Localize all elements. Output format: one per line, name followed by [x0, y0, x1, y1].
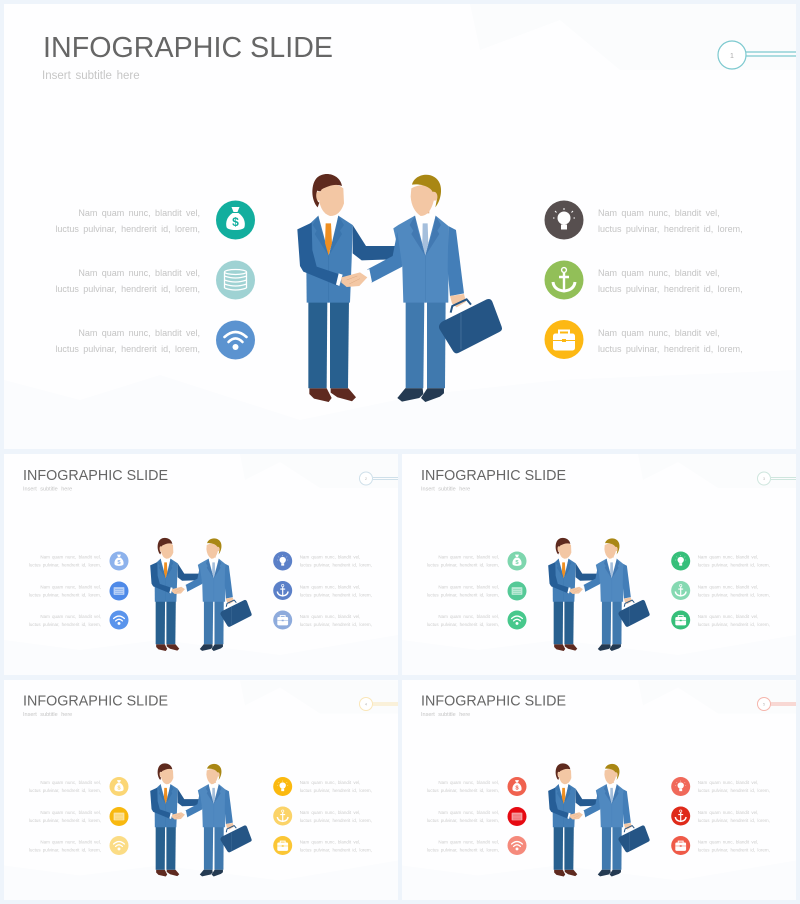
subtitle: Insert subtitle here [421, 486, 470, 492]
text block: left row 3: Nam quam nunc, blandit vel, [78, 328, 200, 338]
text blocks: right: Nam quam nunc, blandit vel, [300, 780, 360, 785]
icons: right [273, 552, 292, 630]
illustration: two businessmen shaking hands [297, 174, 502, 402]
page number badge [360, 472, 398, 485]
icons: left [508, 552, 526, 630]
text blocks: left: luctus pulvinar, hendrerit id, lorem, [29, 622, 101, 627]
text blocks: left: Nam quam nunc, blandit vel, [438, 780, 499, 785]
text block: right row 2 [598, 268, 743, 294]
text blocks: left: Nam quam nunc, blandit vel, [40, 554, 101, 560]
panel: red variant [402, 680, 796, 900]
text blocks: left: Nam quam nunc, blandit vel, [438, 584, 499, 590]
title: INFOGRAPHIC SLIDE [421, 468, 566, 484]
text blocks: right: luctus pulvinar, hendrerit id, lorem, [698, 818, 770, 823]
text block: left row 1 [55, 208, 200, 234]
text blocks: left: luctus pulvinar, hendrerit id, lorem, [427, 562, 499, 568]
text blocks: right: luctus pulvinar, hendrerit id, lorem, [698, 788, 770, 793]
title: INFOGRAPHIC SLIDE [43, 32, 333, 64]
text blocks: left [427, 780, 499, 852]
icon: light bulb [544, 200, 584, 240]
text blocks: right [698, 554, 770, 627]
text blocks: left: luctus pulvinar, hendrerit id, lorem, [427, 592, 499, 598]
text blocks: left: Nam quam nunc, blandit vel, [438, 614, 499, 619]
text blocks: left: luctus pulvinar, hendrerit id, lorem, [29, 848, 101, 852]
text block: right row 1: luctus pulvinar, hendrerit id, lorem, [598, 224, 743, 234]
page number badge [718, 41, 796, 69]
text blocks: left: Nam quam nunc, blandit vel, [40, 584, 101, 590]
text blocks: right [698, 780, 770, 852]
text block: right row 1 [598, 208, 743, 234]
text blocks: right: Nam quam nunc, blandit vel, [300, 840, 360, 844]
icon: money bag [216, 200, 255, 240]
title: INFOGRAPHIC SLIDE [23, 694, 168, 710]
text block: left row 3: luctus pulvinar, hendrerit id, lorem, [55, 344, 200, 354]
page number badge: 5 [763, 702, 766, 706]
text blocks: left: Nam quam nunc, blandit vel, [40, 780, 101, 785]
icons: left [110, 777, 128, 855]
text blocks: right: luctus pulvinar, hendrerit id, lorem, [300, 818, 372, 823]
text blocks: left: luctus pulvinar, hendrerit id, lorem, [29, 562, 101, 568]
icons: left [508, 777, 526, 855]
text blocks: right: Nam quam nunc, blandit vel, [300, 584, 360, 590]
icon: wifi [216, 320, 255, 360]
text blocks: left: Nam quam nunc, blandit vel, [438, 810, 499, 815]
text blocks: left [29, 780, 101, 852]
panel: blue variant [4, 454, 398, 675]
text blocks: left: Nam quam nunc, blandit vel, [40, 810, 101, 815]
text blocks: left: luctus pulvinar, hendrerit id, lorem, [427, 818, 499, 823]
page number badge: 3 [763, 476, 766, 481]
illustration: businessmen [548, 763, 650, 877]
text block: left row 2 [55, 268, 200, 294]
text blocks: right: luctus pulvinar, hendrerit id, lorem, [698, 562, 770, 568]
panel: green variant [402, 454, 796, 675]
page number badge [360, 698, 398, 710]
text block: left row 2: luctus pulvinar, hendrerit id, lorem, [55, 284, 200, 294]
icons: right [273, 777, 292, 855]
page number badge [758, 472, 796, 485]
text blocks: right: Nam quam nunc, blandit vel, [698, 554, 758, 560]
subtitle: Insert subtitle here [42, 70, 140, 82]
page number badge: 4 [365, 702, 368, 706]
text blocks: right: Nam quam nunc, blandit vel, [300, 810, 360, 815]
text blocks: right: Nam quam nunc, blandit vel, [698, 780, 758, 785]
illustration: businessmen [150, 538, 252, 651]
text block: right row 1: Nam quam nunc, blandit vel, [598, 208, 720, 218]
page number badge: 2 [365, 476, 368, 481]
text blocks: left: luctus pulvinar, hendrerit id, lorem, [427, 622, 499, 627]
text blocks: left: Nam quam nunc, blandit vel, [438, 554, 499, 560]
text blocks: right: luctus pulvinar, hendrerit id, lorem, [300, 592, 372, 598]
text blocks: right: Nam quam nunc, blandit vel, [698, 810, 758, 815]
illustration: businessmen [548, 538, 650, 651]
text blocks: right: luctus pulvinar, hendrerit id, lorem, [300, 848, 372, 852]
text blocks: left: luctus pulvinar, hendrerit id, lorem, [29, 788, 101, 793]
text blocks: right: Nam quam nunc, blandit vel, [698, 614, 758, 619]
subtitle: Insert subtitle here [23, 486, 72, 492]
text block: right row 3: Nam quam nunc, blandit vel, [598, 328, 720, 338]
text blocks: right: luctus pulvinar, hendrerit id, lorem, [300, 622, 372, 627]
text blocks: left: luctus pulvinar, hendrerit id, lorem, [427, 848, 499, 852]
text blocks: right [300, 780, 372, 852]
text block: left row 2: Nam quam nunc, blandit vel, [78, 268, 200, 278]
icon: coin stack [216, 260, 255, 300]
subtitle: Insert subtitle here [23, 712, 72, 718]
text blocks: right: Nam quam nunc, blandit vel, [300, 614, 360, 619]
text blocks: right: luctus pulvinar, hendrerit id, lorem, [698, 622, 770, 627]
text blocks: right: Nam quam nunc, blandit vel, [698, 584, 758, 590]
icons: left [110, 552, 128, 630]
text block: right row 2: Nam quam nunc, blandit vel, [598, 268, 720, 278]
text block: left row 1: luctus pulvinar, hendrerit id, lorem, [55, 224, 200, 234]
text blocks: left: luctus pulvinar, hendrerit id, lorem, [427, 788, 499, 793]
text blocks: left [29, 554, 101, 627]
text blocks: right: luctus pulvinar, hendrerit id, lorem, [698, 848, 770, 852]
illustration: businessmen [150, 763, 252, 877]
page number badge: 1 [730, 53, 734, 60]
text blocks: left [427, 554, 499, 627]
title: INFOGRAPHIC SLIDE [421, 694, 566, 710]
title: INFOGRAPHIC SLIDE [23, 468, 168, 484]
text blocks: right [300, 554, 372, 627]
text block: right row 2: luctus pulvinar, hendrerit id, lorem, [598, 284, 743, 294]
text blocks: left: luctus pulvinar, hendrerit id, lorem, [29, 592, 101, 598]
panel: main slide [4, 4, 796, 449]
text block: left row 1: Nam quam nunc, blandit vel, [78, 208, 200, 218]
text blocks: right: luctus pulvinar, hendrerit id, lorem, [300, 788, 372, 793]
text blocks: left: Nam quam nunc, blandit vel, [40, 614, 101, 619]
text blocks: left: Nam quam nunc, blandit vel, [40, 840, 101, 844]
text block: right row 3 [598, 328, 743, 354]
text blocks: right: Nam quam nunc, blandit vel, [698, 840, 758, 844]
text blocks: left: luctus pulvinar, hendrerit id, lorem, [29, 818, 101, 823]
text block: left row 3 [55, 328, 200, 354]
subtitle: Insert subtitle here [421, 712, 470, 718]
icon: anchor [544, 260, 584, 300]
icon: briefcase [544, 320, 584, 359]
text blocks: right: luctus pulvinar, hendrerit id, lorem, [698, 592, 770, 598]
text blocks: left: Nam quam nunc, blandit vel, [438, 840, 499, 844]
page number badge [758, 698, 796, 710]
text blocks: right: luctus pulvinar, hendrerit id, lorem, [300, 562, 372, 568]
icons: right [671, 777, 690, 855]
text block: right row 3: luctus pulvinar, hendrerit id, lorem, [598, 344, 743, 354]
text blocks: right: Nam quam nunc, blandit vel, [300, 554, 360, 560]
icons: right [671, 552, 690, 630]
panel: yellow variant [4, 680, 398, 900]
